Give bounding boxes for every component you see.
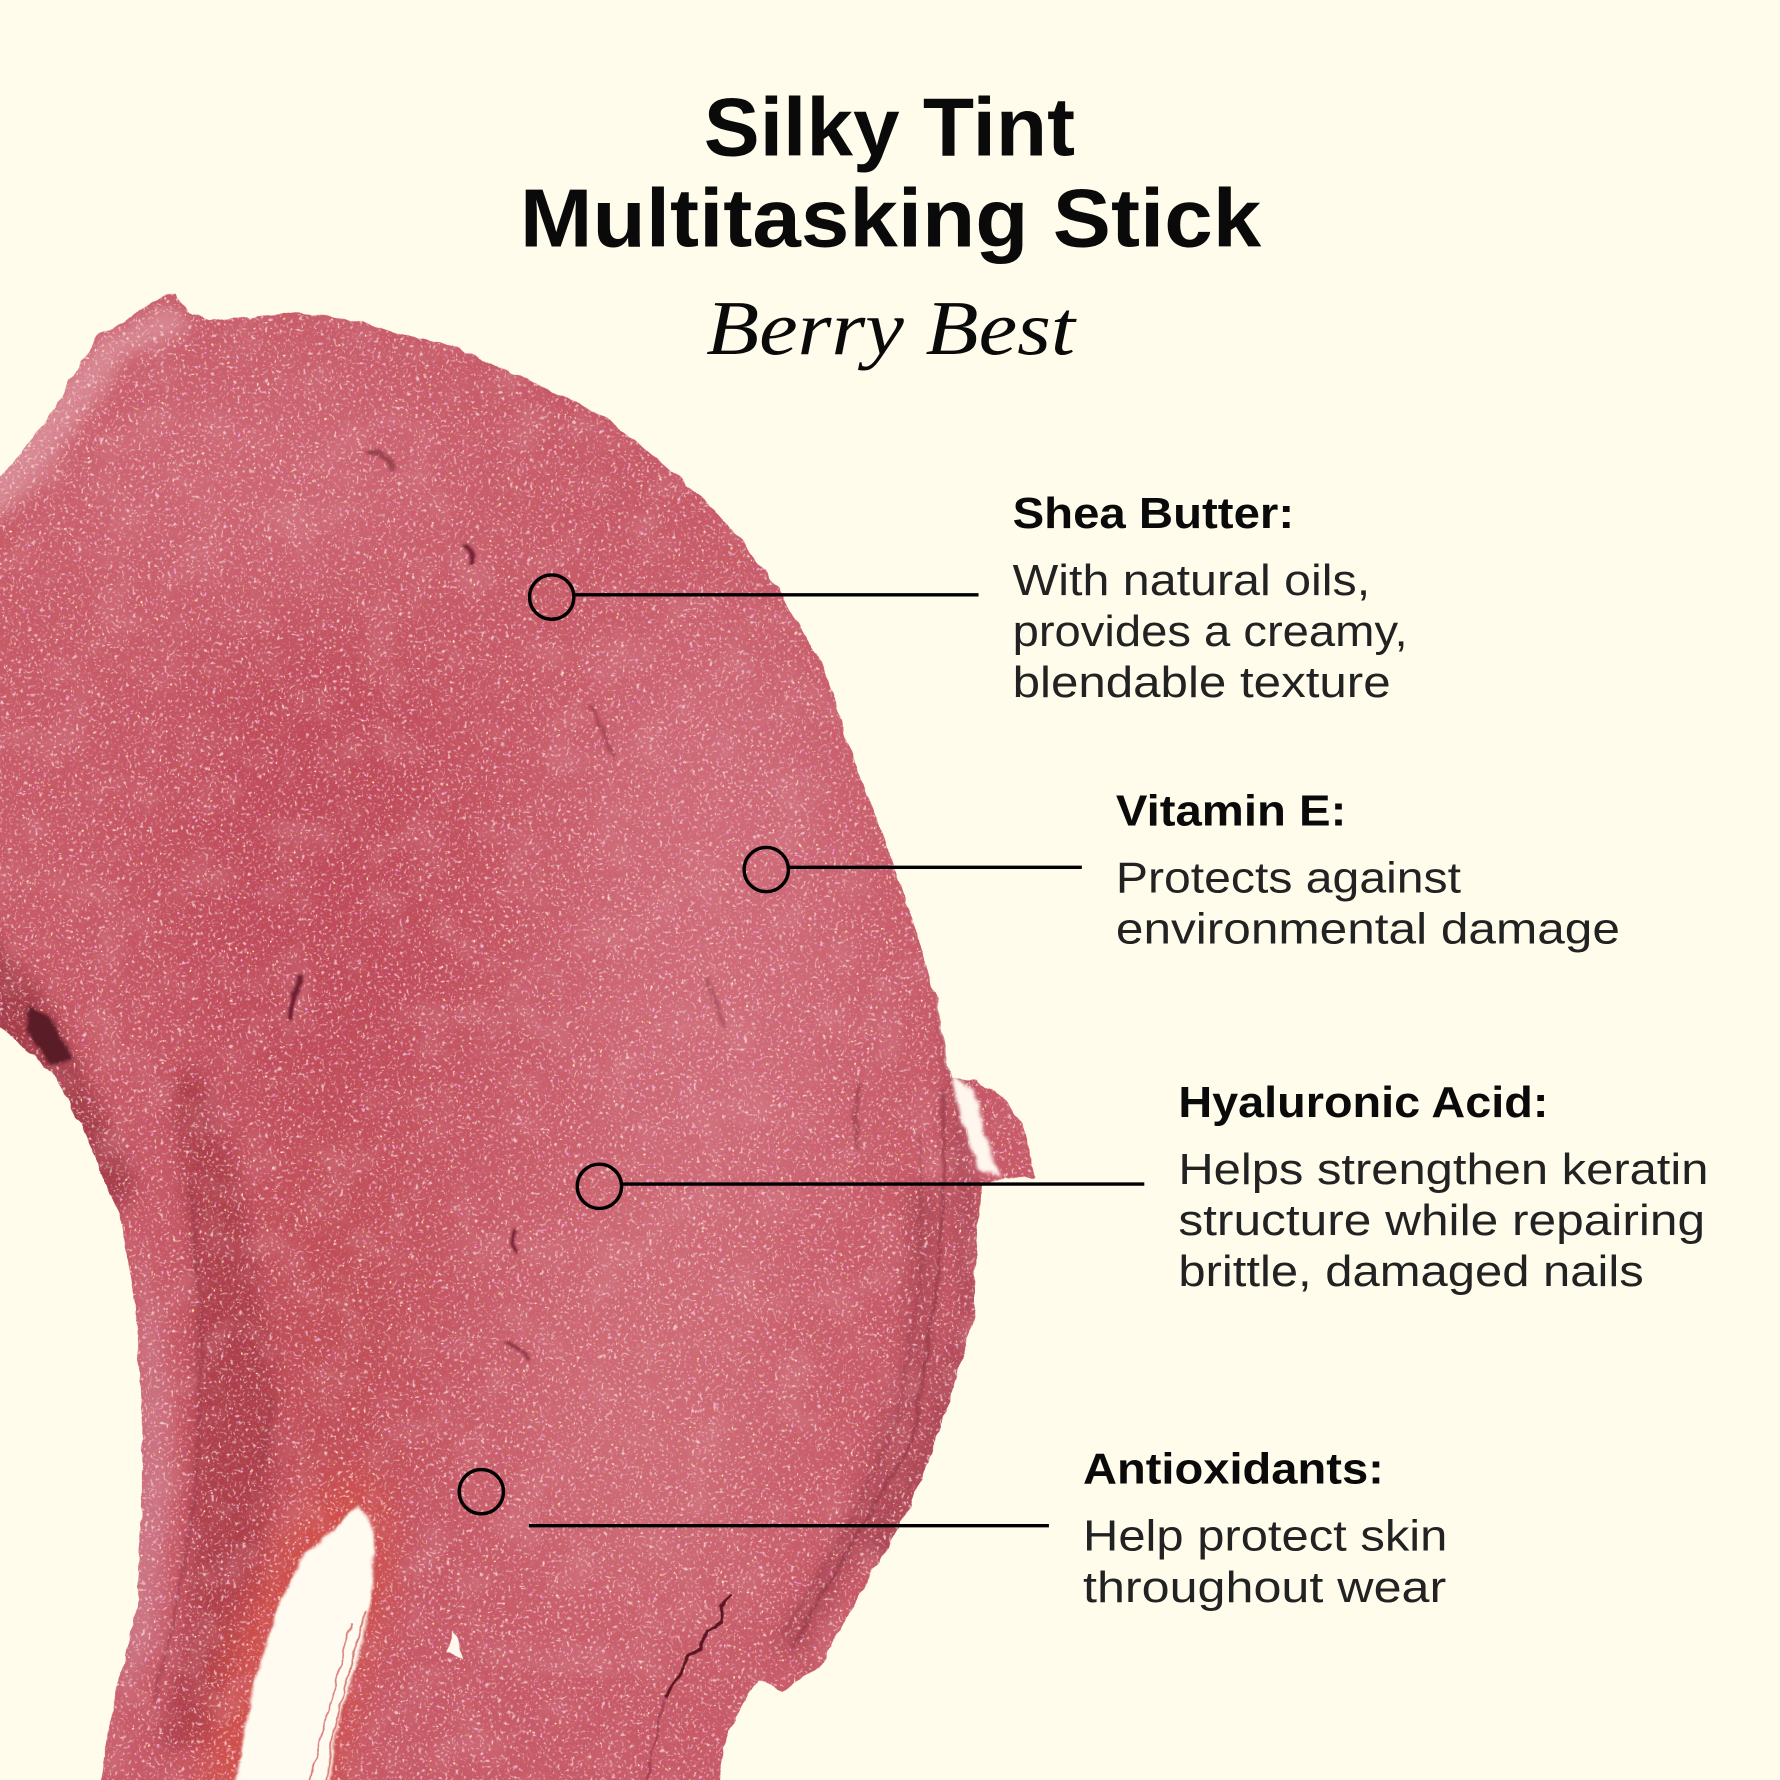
- callout: Shea Butter: [530, 490, 1408, 707]
- callout: Antioxidants: throughout wear: [1083, 1564, 1446, 1612]
- callout: Hyaluronic Acid: brittle, damaged nails: [1178, 1248, 1644, 1296]
- pale edge strip: [0, 304, 193, 1703]
- callout: Shea Butter: Shea Butter:: [1013, 490, 1294, 538]
- callout: Shea Butter: With natural oils,: [1013, 557, 1370, 605]
- callout: Antioxidants: Help protect skin: [1083, 1513, 1447, 1561]
- title: [520, 81, 1262, 264]
- callout: Vitamin E: [744, 787, 1620, 953]
- callout: Vitamin E: Protects against: [1116, 854, 1461, 902]
- marker and leader line: [459, 1470, 1049, 1526]
- tonal shading: [34, 363, 851, 1623]
- callout: Vitamin E: Vitamin E:: [1116, 787, 1346, 835]
- ridge lines: [153, 1090, 944, 1703]
- callout: Shea Butter: blendable texture: [1013, 659, 1391, 707]
- lipstick swatch: [0, 293, 1036, 1780]
- title: Silky Tint: [704, 81, 1075, 174]
- marker and leader line: [530, 575, 979, 619]
- callout: Hyaluronic Acid: Hyaluronic Acid:: [1178, 1079, 1548, 1127]
- red halo around streak: [193, 1464, 392, 1780]
- small tear: [447, 1630, 463, 1657]
- callout: Hyaluronic Acid: [577, 1079, 1708, 1296]
- marker and leader line: [577, 1164, 1144, 1208]
- marker and leader line: [744, 847, 1082, 892]
- surface marks: [291, 452, 860, 1360]
- dark notch: [27, 1006, 73, 1065]
- callout: Vitamin E: environmental damage: [1116, 905, 1620, 953]
- subtitle: Berry Best: [706, 285, 1077, 371]
- dark ridges: [0, 908, 974, 1748]
- callout: Shea Butter: provides a creamy,: [1013, 608, 1408, 656]
- crack: [665, 1596, 732, 1698]
- callout: Antioxidants: [459, 1446, 1447, 1612]
- title: Multitasking Stick: [520, 171, 1262, 264]
- callout: Hyaluronic Acid: Helps strengthen keratin: [1178, 1146, 1708, 1194]
- callout: Hyaluronic Acid: structure while repairing: [1178, 1197, 1705, 1245]
- white gap near blob: [935, 993, 999, 1176]
- mottled surface: [0, 318, 977, 1780]
- glitter texture: [0, 294, 1035, 1780]
- white streak: [229, 1505, 375, 1780]
- streak fibres: [302, 1612, 366, 1780]
- callout: Antioxidants: Antioxidants:: [1083, 1446, 1384, 1494]
